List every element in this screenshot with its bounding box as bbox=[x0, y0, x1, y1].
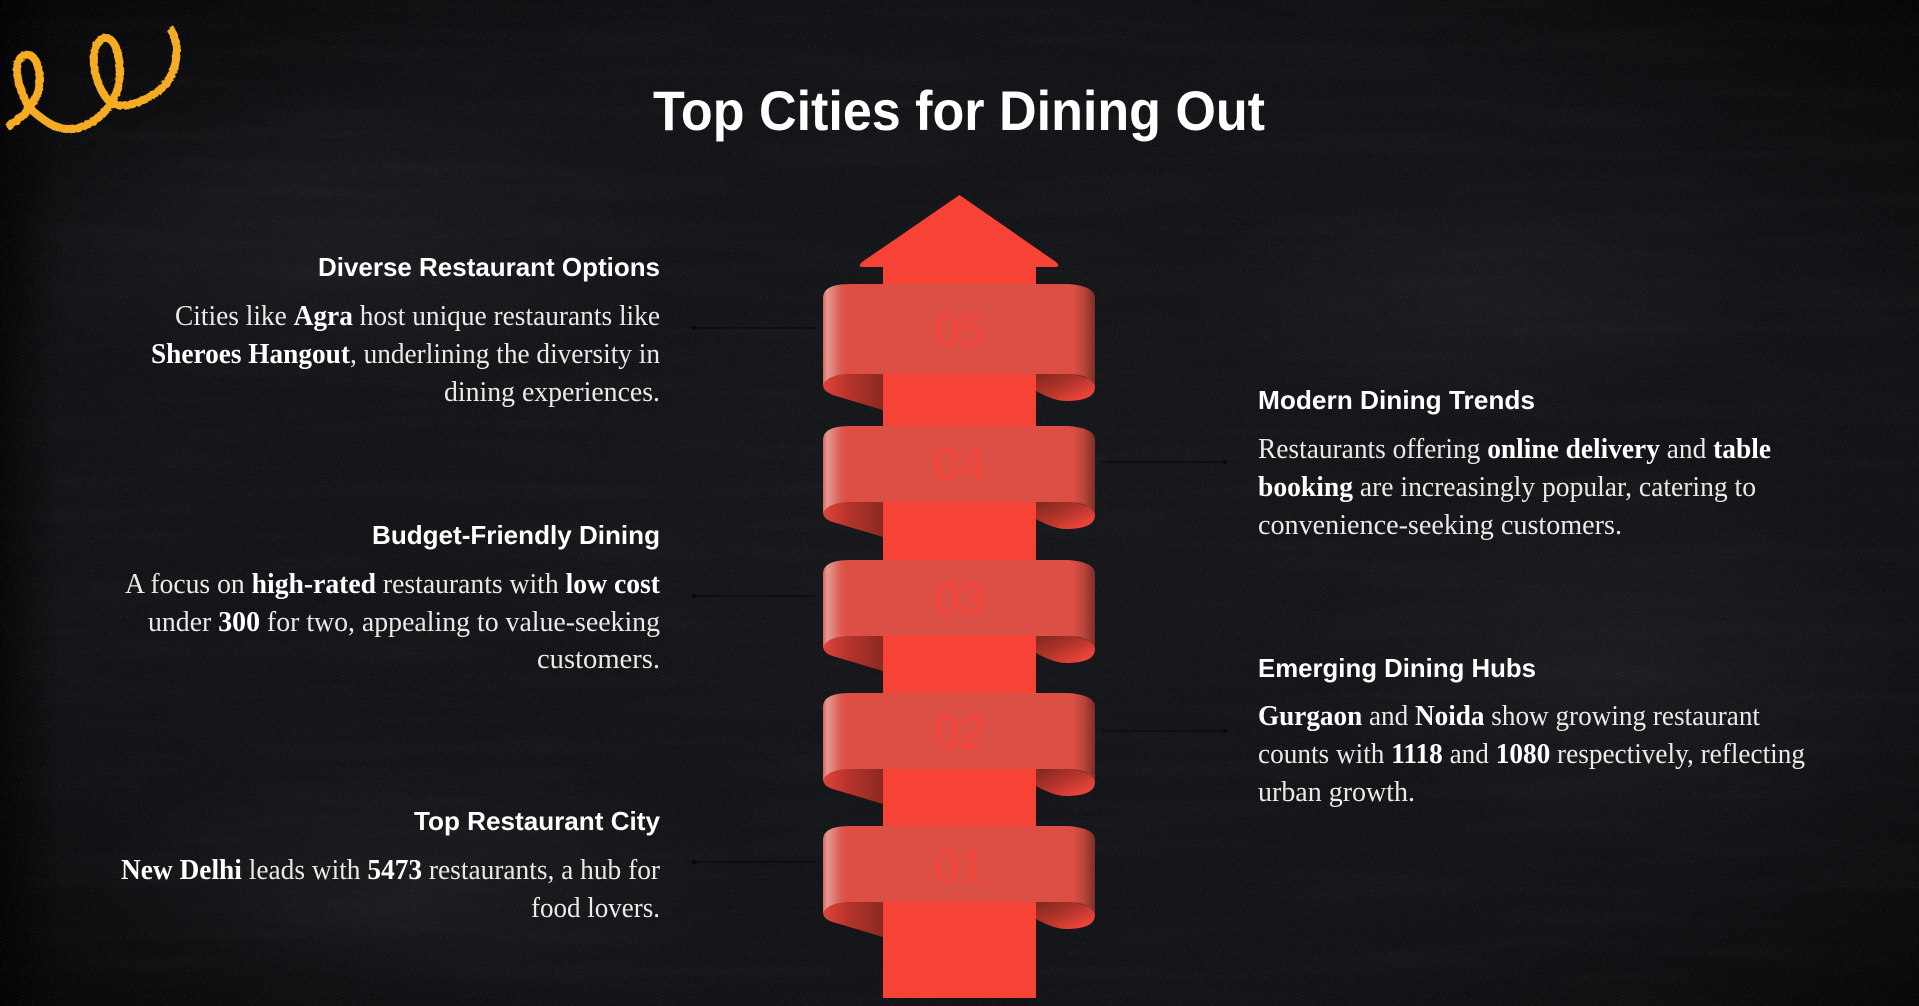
ribbon 03: 03 bbox=[934, 572, 985, 624]
arrow shaft and head bbox=[860, 195, 1058, 998]
ribbon 03 bbox=[823, 560, 1095, 671]
text block: Budget-Friendly Dining: Budget-Friendly Dining bbox=[372, 520, 660, 550]
text block: Emerging Dining Hubs: Gurgaon and Noida show growing restaurant bbox=[1258, 701, 1760, 732]
text block: Budget-Friendly Dining: A focus on high-rated restaurants with low cost bbox=[125, 569, 661, 600]
text block: Top Restaurant City: Top Restaurant City bbox=[414, 806, 661, 836]
connector: ribbon 01 bbox=[692, 860, 815, 864]
connector: ribbon 02 bbox=[1102, 729, 1227, 733]
ribbon 04: 04 bbox=[934, 438, 985, 490]
text block: Top Restaurant City: food lovers. bbox=[531, 893, 660, 924]
text block: Modern Dining Trends: booking are increasingly popular, catering to bbox=[1258, 472, 1756, 503]
ribbon 01 bbox=[823, 826, 1095, 937]
ribbon 05: 05 bbox=[934, 304, 985, 356]
ribbon 01: 01 bbox=[934, 840, 985, 892]
text block: Emerging Dining Hubs: counts with 1118 and 1080 respectively, reflecting bbox=[1258, 739, 1805, 770]
text block: Modern Dining Trends: Modern Dining Trends bbox=[1258, 385, 1535, 415]
text block: Diverse Restaurant Options: Sheroes Hangout, underlining the diversity in bbox=[151, 339, 660, 370]
connector: ribbon 04 bbox=[1102, 460, 1227, 464]
text block: Modern Dining Trends: convenience-seeking customers. bbox=[1258, 510, 1622, 541]
text block: Top Restaurant City bbox=[121, 806, 661, 924]
text block: Diverse Restaurant Options: Cities like Agra host unique restaurants like bbox=[175, 301, 660, 332]
ribbon 04 bbox=[823, 426, 1095, 537]
ribbon 02: 02 bbox=[934, 706, 985, 758]
text block: Top Restaurant City: New Delhi leads with 5473 restaurants, a hub for bbox=[121, 855, 661, 886]
ribbon 05 bbox=[823, 284, 1095, 410]
text block: Emerging Dining Hubs bbox=[1258, 653, 1805, 808]
ribbon 02 bbox=[823, 693, 1095, 804]
icon: yellow chalk squiggle bbox=[7, 28, 177, 129]
connector: ribbon 03 bbox=[692, 594, 815, 598]
text block: Emerging Dining Hubs: urban growth. bbox=[1258, 777, 1415, 808]
text block: Budget-Friendly Dining bbox=[125, 520, 661, 675]
text block: Diverse Restaurant Options bbox=[151, 252, 660, 408]
text block: Diverse Restaurant Options: dining experiences. bbox=[444, 377, 660, 408]
text block: Diverse Restaurant Options: Diverse Restaurant Options bbox=[318, 252, 660, 282]
connector: ribbon 05 bbox=[692, 326, 815, 330]
text block: Modern Dining Trends: Restaurants offering online delivery and table bbox=[1258, 434, 1771, 465]
text block: Modern Dining Trends bbox=[1258, 385, 1771, 541]
title: Top Cities for Dining Out bbox=[653, 79, 1265, 142]
text block: Budget-Friendly Dining: under 300 for two, appealing to value-seeking bbox=[148, 607, 660, 638]
text block: Budget-Friendly Dining: customers. bbox=[537, 644, 660, 675]
arrow graphic with ribbons bbox=[823, 195, 1095, 998]
text block: Emerging Dining Hubs: Emerging Dining Hubs bbox=[1258, 653, 1536, 683]
